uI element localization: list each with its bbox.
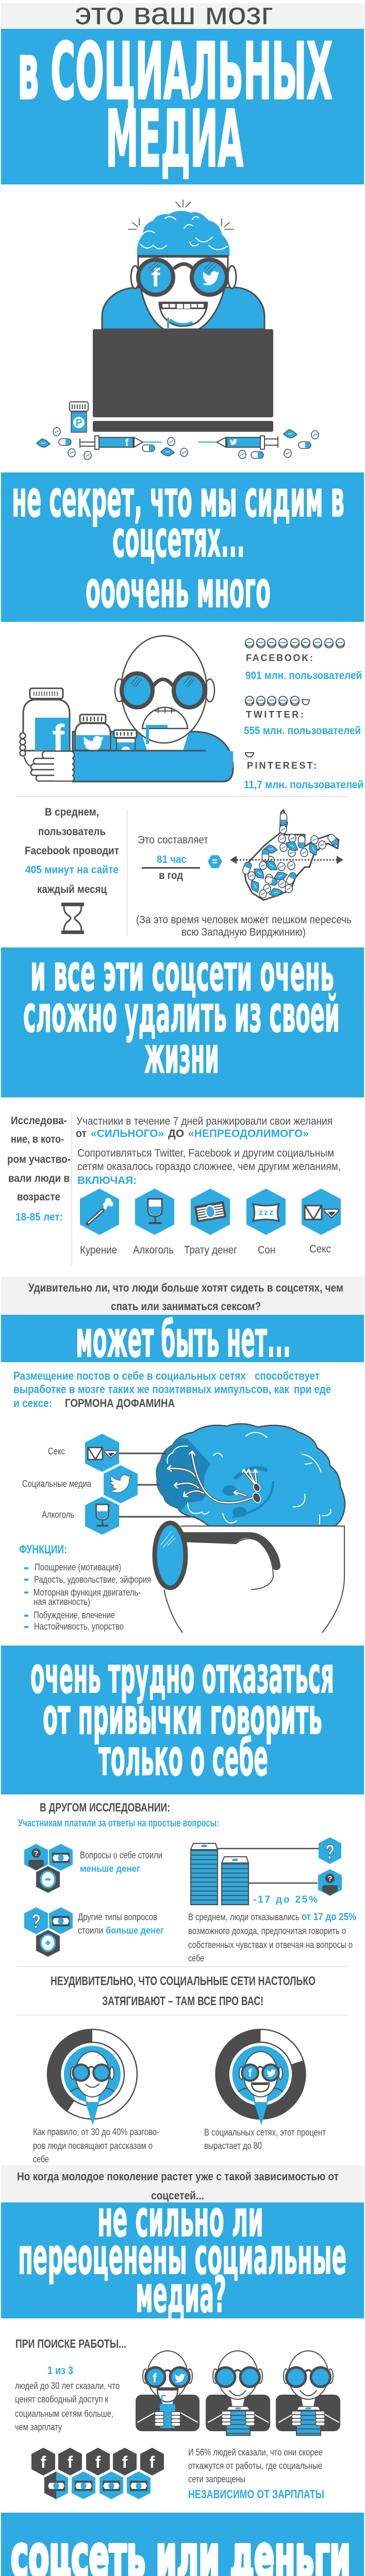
icon: figure with money 1 xyxy=(206,2351,270,2435)
labels: desires: Трату денег xyxy=(184,1244,237,1256)
icon: figure with phone: f xyxy=(153,2371,157,2385)
icon: figure with money 2 xyxy=(276,2351,340,2435)
labels: desires: Курение xyxy=(80,1244,117,1256)
list: dopamine functions: Побуждение, влечение xyxy=(34,1610,115,1620)
text block: desires study: от xyxy=(76,1128,87,1140)
icon: glasses with logos: f xyxy=(152,263,160,292)
icon: arm fill xyxy=(73,751,233,782)
caption: 30 to 40 percent xyxy=(33,2127,159,2164)
icon: twitter bottle xyxy=(75,715,110,753)
icon: body xyxy=(73,732,233,782)
labels: desires: Секс xyxy=(309,1243,331,1255)
icon: neural pathways xyxy=(168,1451,262,1504)
icon: question hexagon xyxy=(319,1837,341,1864)
icon: ears xyxy=(131,266,236,289)
icon: shoulders xyxy=(102,287,264,329)
text: self questions xyxy=(80,1850,162,1874)
labels: triggers xyxy=(22,1446,92,1520)
chart: hexagon 56 percent xyxy=(31,2448,164,2499)
labels: desires xyxy=(80,1243,331,1256)
icon: figure with phone xyxy=(136,2351,200,2431)
icon: addicted face xyxy=(239,2052,283,2097)
icons: desires hexagons xyxy=(80,1189,341,1235)
text block: study participants: вали люди в xyxy=(8,1173,70,1184)
list: dopamine functions: Радость, удовольствие, эйфория xyxy=(34,1574,151,1585)
panel: user stats xyxy=(244,639,363,791)
icon: face xyxy=(138,256,228,329)
panel: section band 4 xyxy=(1,1315,364,1362)
chart: hexagon 56 percent: f xyxy=(41,2453,46,2471)
icon: facebook syringe: f xyxy=(125,437,129,449)
labels: triggers: Секс xyxy=(48,1446,65,1456)
text block: desires study: Участники в течение 7 дней ранжировали свои желания xyxy=(76,1115,333,1127)
icon: hand xyxy=(31,751,74,781)
icon: pin xyxy=(85,2101,99,2125)
chart: money stacks xyxy=(191,1837,342,1905)
text block: average time: 405 минут на сайте xyxy=(25,864,119,876)
text block: average time xyxy=(25,806,119,895)
chart: hexagon 56 percent: f xyxy=(150,2453,155,2471)
icon: pillow xyxy=(246,1189,286,1235)
icon: laptop base xyxy=(93,421,273,432)
icon: lens xyxy=(155,1523,186,1588)
text block: study participants: ние, в кото- xyxy=(11,1133,64,1145)
panel: grey question band xyxy=(1,1277,364,1315)
icon: laptop screen xyxy=(93,329,273,417)
caption: grows to 80: вырастает до 80 xyxy=(204,2141,262,2151)
text block: one in three: людей до 30 лет сказали, что xyxy=(15,2381,120,2391)
icon: wine glass xyxy=(135,1189,174,1235)
icon: neck xyxy=(142,734,188,750)
heading: another study: В ДРУГОМ ИССЛЕДОВАНИИ: xyxy=(40,1801,170,1814)
icon: underwear xyxy=(302,1189,341,1235)
text: жизни xyxy=(144,1027,219,1084)
text block: dopamine: ГОРМОНА ДОФАМИНА xyxy=(65,1397,175,1410)
labels: desires: Сон xyxy=(258,1244,275,1256)
icon: person question hexagon xyxy=(318,1869,342,1896)
icon: equals hexagon xyxy=(208,855,222,868)
text: question xyxy=(28,1281,343,1313)
text block: average time: Facebook проводит xyxy=(25,845,119,857)
icon: money xyxy=(191,1189,230,1235)
subheading: paid questions: Участникам платили за ответы на простые вопросы: xyxy=(18,1818,219,1829)
text block: study participants: Исследова- xyxy=(11,1115,67,1127)
icon: open mouth xyxy=(159,302,207,329)
stack: self questions pay xyxy=(191,1843,218,1905)
text block: 56 percent xyxy=(188,2447,324,2501)
text: question: спать или заниматься сексом? xyxy=(111,1300,261,1313)
illustration: addicted man behind laptop xyxy=(37,200,319,460)
text: other questions: Другие типы вопросов xyxy=(78,1912,157,1922)
caption: grows to 80 xyxy=(204,2127,326,2151)
text block: study participants: 18-85 лет: xyxy=(15,1211,63,1223)
panel: section band 5 xyxy=(1,1646,364,1794)
icon: facebook syringe xyxy=(80,436,162,449)
text block: dopamine: способствует xyxy=(255,1369,320,1382)
text block: study participants xyxy=(7,1115,71,1223)
text block: 56 percent: откажутся от работы, где социальные xyxy=(188,2461,322,2471)
chart: hexagon 56 percent: f xyxy=(122,2453,128,2471)
icon: sex hexagon xyxy=(85,1434,119,1472)
text block: dopamine: и сексе: xyxy=(13,1397,52,1410)
label: facebook: FACEBOOK: xyxy=(246,653,313,663)
panel: section band 3 xyxy=(1,947,364,1097)
text block: 56 percent: И 56% людей сказали, что они скорее xyxy=(188,2447,323,2458)
icon: twitter pill row xyxy=(245,697,309,706)
icon: calm face xyxy=(71,2052,114,2097)
icon: brain xyxy=(137,211,229,256)
icon: head xyxy=(121,636,207,743)
text: self questions: меньше денег xyxy=(80,1863,140,1874)
text block: average time: пользователь xyxy=(38,826,106,838)
text: other questions: стоили xyxy=(78,1925,103,1936)
icon cluster: other questions plus xyxy=(24,1907,73,1957)
caption: 30 to 40 percent: ров люди посвящают рассказам о xyxy=(33,2141,153,2151)
text block: desires study xyxy=(76,1115,341,1187)
caption: 30 to 40 percent: Как правило, от 30 до 40% разгово- xyxy=(33,2127,159,2137)
text block: dopamine: выработке в мозге таких же позитивных импульсов, как xyxy=(13,1383,290,1396)
icon: smoking xyxy=(80,1189,119,1235)
text: young generation: соцсетей... xyxy=(151,2189,204,2202)
heading: no wonder xyxy=(51,1974,316,2008)
label: 17 to 25 percent: -17 до 25% xyxy=(253,1894,318,1905)
text block: desires study: сетям оказалось гораздо сложнее, чем другим желаниям, xyxy=(77,1161,341,1173)
text block: study participants: ром участво- xyxy=(7,1154,71,1165)
text block: 81 hours: Это составляет xyxy=(138,834,208,846)
icon: large facebook bottle xyxy=(23,688,70,759)
text block: one in three: чем зарплату xyxy=(15,2422,62,2432)
text block: 56 percent: НЕЗАВИСИМО ОТ ЗАРПЛАТЫ xyxy=(188,2487,324,2501)
panel: grey generation band xyxy=(1,2165,364,2202)
label: twitter: TWITTER: xyxy=(246,709,304,720)
text block: desires study: «СИЛЬНОГО» xyxy=(91,1128,164,1140)
heading: functions: ФУНКЦИИ: xyxy=(19,1543,67,1556)
panel: final band xyxy=(1,2513,364,2576)
list: dopamine functions: Поощрение (мотивация) xyxy=(35,1562,121,1572)
icon: pinterest bottle xyxy=(114,730,137,756)
arrow: width of state xyxy=(230,856,343,864)
text: income refused: себе xyxy=(188,1953,204,1963)
icon: scattered pills xyxy=(37,428,319,460)
text block: 81 hours: в год xyxy=(159,870,183,882)
icon: brain rays xyxy=(128,200,234,229)
icon: arm line xyxy=(73,750,206,782)
heading: job search: ПРИ ПОИСКЕ РАБОТЫ... xyxy=(15,2337,126,2350)
icon: large facebook bottle: f xyxy=(52,718,65,759)
text: other questions xyxy=(78,1912,164,1936)
icon: pinterest pill bottle: P xyxy=(76,418,82,429)
icon: addicted face: f xyxy=(248,2066,252,2079)
panel: top grey band xyxy=(1,3,364,29)
icon: alcohol hexagon xyxy=(85,1497,119,1535)
text: young generation xyxy=(17,2170,339,2202)
icon: pinterest partial pill xyxy=(245,753,254,757)
list: dopamine functions: Настойчивость, упорство xyxy=(34,1621,124,1632)
text block: dopamine: Размещение постов о себе в социальных сетях xyxy=(13,1369,246,1382)
icon: brain xyxy=(150,1423,345,1526)
chart: donut 80 percent xyxy=(215,2029,306,2125)
chart: hexagon 56 percent: f xyxy=(95,2453,101,2471)
text block: one in three xyxy=(15,2365,120,2432)
icon: pin xyxy=(254,2101,268,2125)
icon: pillow: zzz xyxy=(259,1208,273,1217)
text block: desires study: Сопротивляться Twitter, Facebook и другим социальным xyxy=(77,1147,334,1159)
caption: 30 to 40 percent: себе xyxy=(33,2154,49,2164)
text: income refused xyxy=(188,1911,356,1963)
text: медиа? xyxy=(136,2266,226,2324)
icon: glasses xyxy=(122,673,205,707)
heading: no wonder: ЗАТЯГИВАЮТ – ТАМ ВСЕ ПРО ВАС! xyxy=(102,1994,263,2008)
icon: head outline xyxy=(164,1526,344,1633)
icon: hair line xyxy=(138,255,228,258)
text block: desires study: ДО xyxy=(168,1128,184,1140)
icon: mouth xyxy=(142,707,188,744)
panel: section band 6 xyxy=(1,2202,364,2318)
labels: desires: Алкоголь xyxy=(133,1244,174,1256)
caption: grows to 80: В социальных сетях, этот процент xyxy=(204,2127,326,2138)
icon: hourglass xyxy=(61,903,84,934)
list: dopamine functions: Моторная функция двигатель- xyxy=(34,1587,141,1598)
chart: hexagon 56 percent: f xyxy=(68,2453,73,2471)
list: dopamine functions: ная активность) xyxy=(34,1597,90,1607)
illustration: brain with head profile xyxy=(150,1423,345,1633)
icon: pinterest pill bottle xyxy=(70,402,88,432)
text block: study participants: возрасте xyxy=(17,1191,60,1203)
text block: dopamine xyxy=(13,1369,331,1410)
text block: 81 hours: 81 час xyxy=(157,854,187,866)
text block: dopamine: при еде xyxy=(294,1383,331,1396)
text block: one in three: ценят свободный доступ к xyxy=(15,2394,108,2404)
text: other questions: больше денег xyxy=(106,1925,164,1936)
label: pinterest: PINTEREST: xyxy=(247,760,317,771)
text: income refused: от 17 до 25% xyxy=(302,1911,356,1923)
caption: walk across West Virginia xyxy=(136,914,352,938)
caption: walk across West Virginia: всю Западную Вирджинию) xyxy=(181,926,306,938)
text: self questions: Вопросы о себе стоили xyxy=(80,1850,162,1860)
icon cluster: other questions plus: ? xyxy=(31,1910,41,1933)
icon: glasses with logos xyxy=(138,260,227,295)
icon: arm outline xyxy=(73,751,233,782)
connector lines xyxy=(119,1453,195,1517)
panel: section band 2 xyxy=(1,472,364,622)
icon: social media hexagon xyxy=(104,1465,138,1503)
text block: average time: В среднем, xyxy=(45,806,99,818)
icon: temple of glasses xyxy=(180,1532,280,1570)
text block: desires study: ВКЛЮЧАЯ: xyxy=(77,1175,137,1187)
illustration: man with pill bottles xyxy=(20,636,233,782)
icon: question hexagon: ? xyxy=(325,1841,335,1863)
stack: other questions pay xyxy=(222,1857,248,1905)
icon cluster: self questions minus xyxy=(24,1844,73,1893)
text block: desires study: «НЕПРЕОДОЛИМОГО» xyxy=(188,1128,309,1140)
icon: beads and cord xyxy=(20,733,31,767)
icon: ears xyxy=(115,679,214,702)
list: dopamine functions xyxy=(24,1562,151,1632)
text block: one in three: социальным сетям больше, xyxy=(15,2409,113,2419)
text block: 56 percent: сети запрещены xyxy=(188,2474,245,2484)
labels: triggers: Алкоголь xyxy=(42,1510,74,1520)
map: West Virginia filled with pills xyxy=(242,810,340,900)
chart: donut 40 percent xyxy=(47,2029,137,2125)
icon: facebook pill row xyxy=(245,639,344,648)
labels: triggers: Социальные медиа xyxy=(22,1479,92,1489)
icons: brain triggers xyxy=(85,1434,195,1535)
text: income refused: В среднем, люди отказывались xyxy=(188,1912,300,1922)
text block: average time: каждый месяц xyxy=(37,884,107,895)
text block: one in three: 1 из 3 xyxy=(47,2365,73,2377)
panel: title band xyxy=(1,29,364,184)
icon: twitter syringe xyxy=(198,436,278,449)
text block: 81 hours xyxy=(138,834,208,882)
